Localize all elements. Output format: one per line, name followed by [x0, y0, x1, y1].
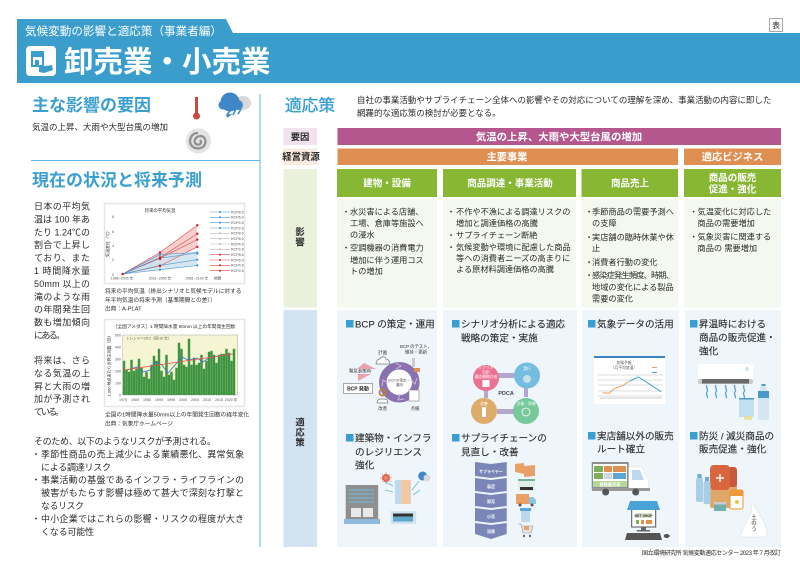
impact column: product sales: 商品売上 [611, 178, 649, 190]
line chart: future mean temperature: 4 [112, 244, 114, 248]
line chart: future mean temperature: RCP2.6 [231, 226, 244, 230]
document tag: 表 [772, 20, 780, 30]
heading: main impact factors: 主な影響の要因 [32, 95, 151, 115]
impact column: buildings and equipment: トの増加 [350, 266, 383, 276]
impact column: promoting product sales: 促進・強化 [709, 184, 757, 196]
current status text: 50mm 以上の [34, 279, 90, 289]
measure: sales routes [588, 430, 674, 456]
impact column: procurement and operations: サプライチェーン断絶 [456, 230, 537, 240]
bar chart: annual occurrences of heavy rain: 200 [115, 370, 121, 374]
bar chart: annual occurrences of heavy rain: 400 [115, 346, 121, 350]
factor bar: 気温の上昇、大雨や大型台風の増加 [476, 130, 642, 143]
future projection text: 昇と大雨の増 [34, 380, 90, 391]
measure: supply chain review [452, 434, 547, 458]
row label: adaptation [284, 310, 317, 547]
row label: impact [284, 169, 317, 308]
caption: chart 1: 出典：A-PLAT [105, 304, 142, 312]
risk list: 事業活動の基盤であるインフラ・ライフラインの [41, 474, 244, 485]
illustration: mobile sales truck: 移動販売車 [600, 481, 620, 488]
bar chart: annual occurrences of heavy rain: 2015 [215, 398, 223, 402]
impact column: procurement and operations: 等への消費者ニーズの高まりに [456, 253, 570, 263]
impact column: buildings and equipment: 空調機器の消費電力 [350, 242, 424, 252]
row label: impact: 影 [295, 226, 305, 237]
impact column: product sales: ・ [585, 233, 593, 242]
factor bar [338, 128, 781, 145]
impact column: product sales: の支障 [592, 218, 617, 228]
heading: adaptation: 適応策 [285, 96, 335, 115]
row label: factor [284, 128, 317, 145]
line chart: future mean temperature: RCP4.5 [231, 264, 244, 268]
impact column: product sales: 実店舗の臨時休業や休 [592, 232, 675, 242]
diagram: PDCA [471, 362, 540, 424]
diagram: supply chain chevrons [475, 462, 507, 539]
diagram: PDCA: 改善 [480, 401, 488, 406]
row label: impact: 響 [295, 236, 305, 248]
impact column: promoting product sales: 商品の販売 [709, 172, 757, 184]
impact column: buildings and equipment: 工場、倉庫等施設へ [350, 218, 424, 228]
current status text: ており、また [34, 253, 90, 263]
icons: supply chain stages [515, 463, 536, 537]
measure: sales routes: ルート確立 [597, 444, 645, 456]
bar chart: annual occurrences of heavy rain: 0 [119, 394, 121, 398]
measure: weather data: 気象データの活用 [597, 318, 674, 330]
bar chart: annual occurrences of heavy rain: 1975 [119, 398, 127, 402]
measure: supply chain review: 見直し・改善 [461, 446, 519, 458]
impact column: procurement and operations: ・ [447, 208, 455, 216]
measure: sales routes: 実店舗以外の販売 [597, 430, 674, 442]
diagram: BCP cycle: BCP 発動 [347, 386, 369, 392]
line chart: weather forecast [594, 356, 665, 404]
impact column: procurement and operations: ・ [447, 243, 455, 252]
risk list: くなる可能性 [41, 526, 94, 537]
bar chart: annual occurrences of heavy rain: 2020 年 [225, 397, 238, 402]
illustration: online shop computer [625, 501, 670, 540]
bar chart: annual occurrences of heavy rain: 1985 [143, 398, 151, 402]
diagram: PDCA: 点検・評価 [517, 401, 536, 406]
current status text: 日本の平均気 [34, 200, 90, 212]
bar chart: annual occurrences of heavy rain: 2010 [203, 398, 211, 402]
impact column: product sales: 地域の変化による製品 [592, 282, 674, 292]
impact column: product sales: 感染症発生頻度、時期、 [592, 270, 674, 280]
measure: sales promotion in heat [690, 320, 776, 358]
impact column: product sales: 消費者行動の変化 [592, 257, 658, 267]
impact column: promoting product sales: ・ [690, 208, 698, 216]
diagram: PDCA: シナリオ [478, 365, 494, 370]
risk list: 中小企業ではこれらの影響・リスクの程度が大き [41, 513, 244, 524]
adaptation panel 1 [337, 310, 437, 547]
line chart: future mean temperature: 0 [112, 273, 114, 277]
diagram: BCP cycle: BCPの策定・ [388, 378, 410, 382]
adaptation intro text: 網羅的な適応策の検討が必要となる。 [357, 108, 501, 118]
measure: building resilience: のレジリエンス [355, 448, 422, 458]
resource bar: adaptation business: 適応ビジネス [702, 150, 763, 164]
adaptation panel 2 [443, 310, 577, 547]
bar chart: annual occurrences of heavy rain [104, 320, 244, 406]
caption: chart 2: 全国の1時間降水量50mm以上の年間発生回数の経年変化 [105, 410, 249, 418]
diagram: BCP cycle: 点検 [411, 405, 420, 412]
resource bar: main business: 主要事業 [487, 150, 527, 164]
bar chart: annual occurrences of heavy rain: 300 [115, 358, 121, 362]
line chart: future mean temperature: RCP8.5 [231, 253, 244, 257]
risk list: そのため、以下のようなリスクが予測される。 [34, 436, 216, 446]
impact column: promoting product sales [684, 169, 781, 308]
diagram: BCP cycle: BCP のテスト、 [400, 344, 432, 350]
impact column: procurement and operations: 不作や不漁による調達リスクの [456, 206, 570, 216]
measure: scenario analysis: 戦略の策定・実施 [461, 332, 538, 344]
impact column: product sales: 季節商品の需要予測へ [592, 206, 674, 216]
measure: sales promotion in heat: 商品の販売促進・ [699, 332, 776, 344]
diagram: PDCA: 実行 [523, 366, 531, 371]
risk list: ・ [32, 475, 41, 485]
diagram: BCP cycle: 改善 [378, 405, 388, 412]
diagram: PDCA: PDCA [498, 391, 514, 397]
divider [31, 160, 260, 162]
bar chart: annual occurrences of heavy rain: 500 [115, 334, 121, 338]
line chart: future mean temperature: 8 [112, 215, 114, 219]
bar chart: annual occurrences of heavy rain: 1990 [155, 398, 163, 402]
line chart: future mean temperature: RCP6.0 [231, 237, 244, 241]
future projection text: ている。 [34, 407, 64, 417]
illustration: air conditioner and drinks [698, 364, 769, 420]
row label: management resources [282, 148, 320, 165]
line chart: future mean temperature: RCP2.6 [231, 248, 244, 252]
impact column: product sales [582, 169, 678, 308]
resource bar: main business [338, 148, 678, 165]
line chart: future mean temperature: RCP4.5 [231, 242, 244, 246]
bar chart: annual occurrences of heavy rain: トレンド＝29.2（回/10 年） [126, 336, 171, 340]
line chart: future mean temperature: 期間 [214, 276, 222, 280]
illustration: online shop computer: NET SHOP [635, 514, 653, 518]
impact column: promoting product sales: 商品の需要増加 [698, 218, 755, 228]
impact column: product sales: 止 [592, 243, 600, 253]
icon: rain cloud [218, 92, 251, 117]
measure: scenario analysis: シナリオ分析による適応 [461, 318, 565, 330]
diagram: supply chain chevrons: サプライヤー [479, 468, 503, 474]
line chart: future mean temperature: RCP8.5 [231, 232, 244, 236]
impact column: buildings and equipment: 建物・設備 [363, 178, 411, 190]
measure: disaster prevention products: 防災 / 減災商品の [699, 430, 774, 442]
diagram: BCP cycle [344, 344, 432, 412]
adaptation panel 4 [685, 310, 781, 547]
icon: shop and hand [26, 46, 56, 76]
line chart: future mean temperature: RCP6.0 [231, 258, 244, 262]
line chart: future mean temperature: 2081~2100 年 [186, 276, 209, 280]
bar chart: annual occurrences of heavy rain: 2005 [191, 398, 199, 402]
bar chart: annual occurrences of heavy rain: ［全国アメダス］1 時間降水量 50mm 以上の年間発生回数 [113, 323, 236, 330]
impact column: promoting product sales: ・ [690, 232, 698, 242]
risk list: による調達リスク [41, 461, 111, 472]
bar chart: annual occurrences of heavy rain: 1980 [131, 398, 139, 402]
impact column: procurement and operations: 気候変動や環境に配慮した商品 [456, 242, 571, 252]
impact column: product sales: ・ [585, 271, 593, 280]
measure: building resilience: 建築物・インフラ [355, 432, 431, 444]
risk list: ・ [32, 450, 41, 460]
risk list: ・ [32, 514, 41, 524]
measure: disaster prevention products: 販売促進・強化 [699, 444, 767, 456]
impact column: buildings and equipment: の浸水 [350, 230, 375, 240]
impact column: product sales: 需要の変化 [592, 294, 633, 304]
current status text: の年間発生回 [34, 304, 90, 315]
line chart: weather forecast: （月平均気温） [611, 365, 637, 370]
risk list: なるリスク [41, 501, 84, 511]
row label: adaptation: 適 [295, 416, 305, 428]
impact column: promoting product sales: 商品の 需要増加 [698, 243, 757, 253]
impact column: procurement and operations: ・ [447, 231, 455, 240]
impact column: buildings and equipment: 水災害による店舗、 [350, 206, 423, 216]
measure: building resilience: 強化 [355, 460, 375, 472]
future projection text: 将来は、さら [34, 354, 90, 366]
future projection text: 加が予測され [34, 393, 90, 404]
caption: chart 2: 出典：気象庁ホームページ [105, 420, 173, 428]
measure: scenario analysis [452, 318, 565, 344]
current status text: 温は 100 年あ [34, 213, 90, 224]
measure: disaster prevention products [690, 430, 774, 456]
adaptation panel 3 [582, 310, 679, 547]
diagram: PDCA: 分析 [482, 370, 490, 374]
impact column: promoting product sales: 気温変化に対応した [698, 206, 771, 216]
line chart: future mean temperature: 2 [112, 258, 114, 262]
illustration: emergency supplies: の [751, 520, 757, 527]
document tag [770, 18, 782, 32]
bar chart: annual occurrences of heavy rain: 100 [115, 382, 121, 386]
impact column: buildings and equipment: ・ [342, 208, 350, 216]
diagram: BCP cycle: 運用 [396, 382, 403, 387]
measure: sales promotion in heat: 強化 [699, 346, 719, 358]
line chart: future mean temperature: 2031~2050 年 [149, 276, 172, 280]
impact column: buildings and equipment: ・ [342, 244, 350, 252]
icon: typhoon [186, 128, 211, 154]
diagram: BCP cycle: 維持・更新 [405, 348, 428, 356]
row label: factor: 要因 [291, 132, 309, 142]
illustration: resilient building [344, 472, 430, 524]
bar chart: annual occurrences of heavy rain: 2000 [179, 398, 187, 402]
impact column: buildings and equipment [337, 169, 437, 308]
impact column: procurement and operations: 増加と調達価格の高騰 [456, 218, 538, 228]
line chart: future mean temperature: RCP4.5 [231, 221, 244, 225]
measure: supply chain review: サプライチェーンの [461, 434, 547, 444]
caption: chart 1: 年平均気温の将来予測（基準期間との差）） [105, 296, 216, 304]
future projection text: なる気温の上 [34, 367, 90, 378]
current status text: 割合で上昇し [34, 239, 90, 250]
footer credit: 国立環境研究所 気候変動適応センター 2023 年 7 月改訂 [642, 549, 781, 557]
diagram: supply chain chevrons: 製造 [487, 483, 495, 489]
line chart: future mean temperature: 気温変化（℃） [104, 229, 110, 257]
illustration: mobile sales truck [592, 462, 650, 496]
line chart: weather forecast: 気候予報 [616, 360, 632, 365]
line chart: future mean temperature: 1986~2005 年 [111, 276, 134, 280]
illustration: emergency supplies: う [751, 526, 757, 533]
line chart: future mean temperature [104, 204, 244, 284]
header title: 卸売業・小売業 [64, 46, 271, 79]
impact column: procurement and operations [443, 169, 576, 308]
row label: adaptation: 策 [295, 436, 305, 448]
icon: thermometer [193, 97, 200, 120]
bar chart: annual occurrences of heavy rain: 1,000 地点あたりの発生回数（回） [106, 333, 112, 397]
resource bar: adaptation business [684, 148, 781, 165]
row label: adaptation: 応 [295, 428, 305, 438]
heading: current status and projection: 現在の状況と将来予測 [32, 171, 202, 190]
impact column: buildings and equipment: 増加に伴う運用コス [350, 255, 424, 265]
measure: BCP: BCP の策定・運用 [355, 318, 435, 330]
line chart: future mean temperature: RCP8.5 [231, 210, 244, 214]
header subtitle: 気候変動の影響と適応策（事業者編） [25, 24, 222, 38]
current status text: 滝のような雨 [34, 291, 90, 302]
risk list: 被害がもたらす影響は極めて甚大で深刻な打撃と [41, 487, 244, 498]
header band [17, 19, 800, 83]
current status text: たり 1.24℃の [34, 227, 90, 237]
diagram: supply chain chevrons: 卸売 [487, 498, 495, 504]
diagram: BCP cycle: 計画 [378, 349, 388, 356]
impact column: promoting product sales: 気象災害に関連する [698, 232, 771, 242]
impact column: procurement and operations: 商品調達・事業活動 [467, 178, 553, 190]
adaptation intro text: 自社の事業活動やサプライチェーン全体への影響やその対応についての理解を深め、事業活動の内容に即した [357, 95, 771, 105]
current status text: 数も増加傾向 [34, 317, 90, 328]
line chart: future mean temperature: RCP2.6 [231, 269, 244, 273]
impact column: product sales: ・ [585, 258, 593, 267]
diagram: PDCA: 適応戦略作成 [475, 374, 498, 379]
line chart: future mean temperature: RCP6.0 [231, 216, 244, 220]
line chart: future mean temperature: 将来の平均気温 [145, 207, 176, 214]
risk list: 季節性商品の売上減少による業績悪化、異常気象 [41, 448, 244, 460]
bar chart: annual occurrences of heavy rain: 1995 [167, 398, 175, 402]
illustration: emergency supplies [696, 465, 767, 537]
current status text: にある。 [34, 330, 65, 340]
impact column: product sales: ・ [585, 208, 593, 216]
diagram: supply chain chevrons: 小売 [487, 513, 495, 519]
measure: sales promotion in heat: 昇温時における [699, 320, 766, 330]
current status text: 1 時間降水量 [34, 265, 90, 276]
diagram: supply chain chevrons: 消費 [487, 528, 495, 534]
impact factors text: 気温の上昇、大雨や大型台風の増加 [32, 122, 168, 132]
illustration: emergency supplies: 土 [751, 513, 757, 521]
row label: management resources: 経営資源 [282, 151, 320, 162]
impact column: procurement and operations: よる原材料調達価格の高騰 [456, 264, 554, 274]
diagram: BCP cycle: 緊急事態時 [349, 368, 372, 374]
caption: chart 1: 将来の平均気温（排出シナリオと気候モデルに対する [105, 287, 242, 295]
line chart: future mean temperature: 6 [112, 230, 114, 234]
